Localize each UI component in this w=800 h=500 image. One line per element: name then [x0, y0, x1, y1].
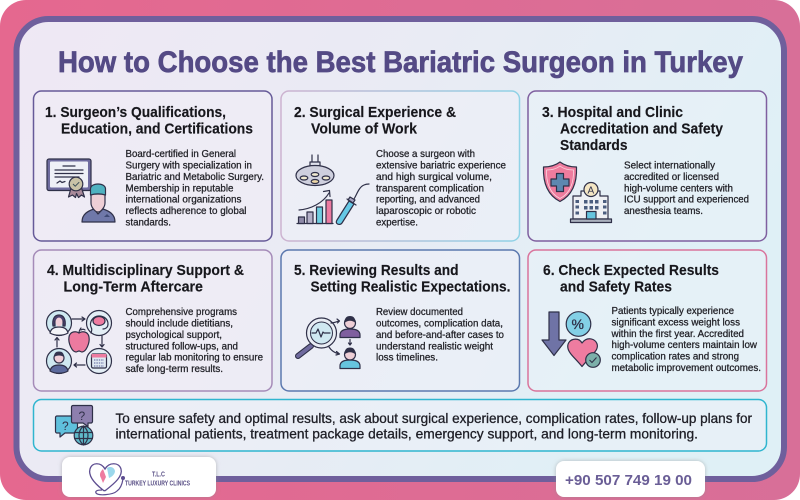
- text block: card 2: expertise.: [376, 216, 418, 228]
- text block: card 1: Surgery with specialization in: [126, 160, 252, 172]
- text block: card 4: structured follow-ups, and: [126, 340, 238, 352]
- text block: card 2: and high surgical volume,: [376, 171, 492, 183]
- heading: card 2: [294, 104, 456, 138]
- text block: card 4: should include dietitians,: [126, 318, 233, 330]
- text block: card 6: metabolic improvement outcomes.: [612, 362, 761, 374]
- text block: card 2: extensive bariatric experience: [376, 160, 506, 172]
- text block: card 3: ICU support and experienced: [624, 194, 749, 206]
- heading: card 5: [294, 262, 510, 296]
- text block: card 5: and before-and-after cases to: [376, 329, 504, 341]
- calendar: [86, 348, 112, 374]
- icon: heart with check: [568, 339, 600, 367]
- text block: card 3: high-volume centers with: [624, 182, 733, 194]
- text block: card 1: Bariatric and Metabolic Surgery.: [126, 171, 264, 183]
- text block: card 4: regular lab monitoring to ensure: [126, 352, 263, 364]
- logo text: [125, 472, 190, 488]
- heading: card 1: 1. Surgeon’s Qualifications,: [45, 104, 226, 121]
- text block: card 1: Membership in reputable: [126, 182, 234, 194]
- text block: card 2: transparent complication: [376, 182, 484, 194]
- text block: card 3: anesthesia teams.: [624, 205, 703, 217]
- text block: card 6: Patients typically experience: [612, 305, 734, 317]
- heading: card 4: 4. Multidisciplinary Support &: [47, 262, 244, 279]
- heading: card 1: [45, 104, 253, 138]
- text block: card 6: high-volume centers maintain low: [612, 339, 757, 351]
- icon: patient before: [340, 316, 360, 338]
- text block: advice: international patients, treatment package details, emergency support, and long-term monitoring.: [116, 426, 698, 442]
- icon: certificate and doctor: [47, 159, 115, 222]
- heading: card 6: and Safety Rates: [560, 278, 672, 296]
- icon: percent badge: [566, 312, 591, 336]
- heading: card 3: 3. Hospital and Clinic: [542, 104, 683, 121]
- text block: card 2: laparoscopic or robotic: [376, 205, 476, 217]
- text block: card 1: standards.: [126, 216, 171, 228]
- heading: card 2: 2. Surgical Experience &: [294, 104, 456, 121]
- arrows between patients: [329, 319, 352, 355]
- phone badge: [556, 461, 705, 497]
- heading: card 5: Setting Realistic Expectations.: [310, 278, 510, 296]
- psychologist head with brain: [86, 310, 112, 336]
- text block: card 4: Comprehensive programs: [126, 306, 237, 318]
- heading: card 1: Education, and Certifications: [61, 120, 253, 138]
- text block: card 4: [126, 306, 263, 375]
- heading: card 6: 6. Check Expected Results: [543, 262, 719, 279]
- heading: card 5: 5. Reviewing Results and: [294, 262, 458, 279]
- logo text: T.L.C: [152, 472, 165, 478]
- text block: card 1: international organizations: [126, 194, 242, 206]
- text block: card 6: complication rates and strong: [612, 351, 739, 363]
- dietitian: [46, 310, 72, 336]
- panel: surgical experience: [281, 91, 520, 241]
- text block: advice: [116, 410, 752, 442]
- text block: card 2: Choose a surgeon with: [376, 148, 475, 160]
- text block: card 6: significant excess weight loss: [612, 316, 740, 328]
- heading: card 2: Volume of Work: [311, 120, 418, 138]
- icon: rising bar chart: [297, 190, 333, 224]
- phone number: +90 507 749 19 00: [565, 472, 692, 489]
- logo text: TURKEY LUXURY CLINICS: [125, 480, 190, 488]
- icon: syringe: [336, 184, 369, 224]
- text block: card 5: [376, 306, 504, 364]
- title: How to Choose the Best Bariatric Surgeon in Turkey: [58, 46, 744, 79]
- heading: card 4: [47, 262, 244, 296]
- text block: card 5: understand realistic weight: [376, 340, 493, 352]
- heading: card 3: Standards: [560, 137, 628, 154]
- patient: [46, 348, 72, 374]
- icon: question bubbles and globe: ?: [62, 419, 69, 433]
- icon: shield with cross: [543, 162, 577, 202]
- text block: card 3: accredited or licensed: [624, 171, 719, 183]
- logo badge: [62, 457, 216, 497]
- panel: multidisciplinary support: [34, 250, 272, 391]
- icon: percent badge: %: [572, 316, 584, 332]
- text block: card 4: psychological support,: [126, 329, 222, 341]
- text block: card 5: outcomes, complication data,: [376, 318, 503, 330]
- icon: down arrow: [542, 312, 566, 356]
- heading: card 6: [543, 262, 719, 296]
- text block: card 5: Review documented: [376, 306, 463, 318]
- apple: [69, 328, 89, 352]
- heading: card 4: Long-Term Aftercare: [64, 278, 203, 296]
- icon: care cycle: [46, 310, 112, 374]
- text block: card 4: safe long-term results.: [126, 363, 223, 375]
- text block: card 2: [376, 148, 506, 228]
- icon: magnifier with pulse: [298, 318, 336, 356]
- text block: card 6: [611, 305, 761, 374]
- panel: expected results: [528, 250, 766, 391]
- text block: card 1: Board-certified in General: [126, 148, 236, 160]
- text block: card 1: [126, 148, 264, 228]
- text block: card 6: within the first year. Accredited: [611, 328, 744, 340]
- text block: card 3: [624, 160, 749, 217]
- heading: card 3: [542, 104, 724, 154]
- icon: hospital building: [570, 182, 612, 222]
- panel: bottom advice banner: [34, 400, 766, 451]
- text block: card 5: loss timelines.: [376, 352, 438, 364]
- text block: card 2: reporting, and advanced: [376, 194, 480, 206]
- cycle arrows: [55, 317, 104, 367]
- text block: card 3: Select internationally: [624, 160, 716, 172]
- icon: surgical lamp: [296, 155, 334, 186]
- heading: card 3: Accreditation and Safety: [560, 120, 724, 138]
- text block: card 1: reflects adherence to global: [126, 205, 246, 217]
- panel: hospital accreditation: [528, 91, 766, 241]
- icon: question bubbles and globe: ?: [78, 409, 86, 423]
- icon: patient after: [340, 348, 360, 368]
- text block: advice: To ensure safety and optimal results, ask about surgical experience, complication rates, follow-up plans for: [116, 410, 752, 426]
- icon: hospital building: A: [588, 186, 594, 196]
- icon: question bubbles and globe: [56, 406, 93, 445]
- logo mark: heart stethoscope: [90, 464, 125, 495]
- panel: surgeon's qualifications: [34, 91, 272, 241]
- panel: reviewing results: [281, 250, 520, 391]
